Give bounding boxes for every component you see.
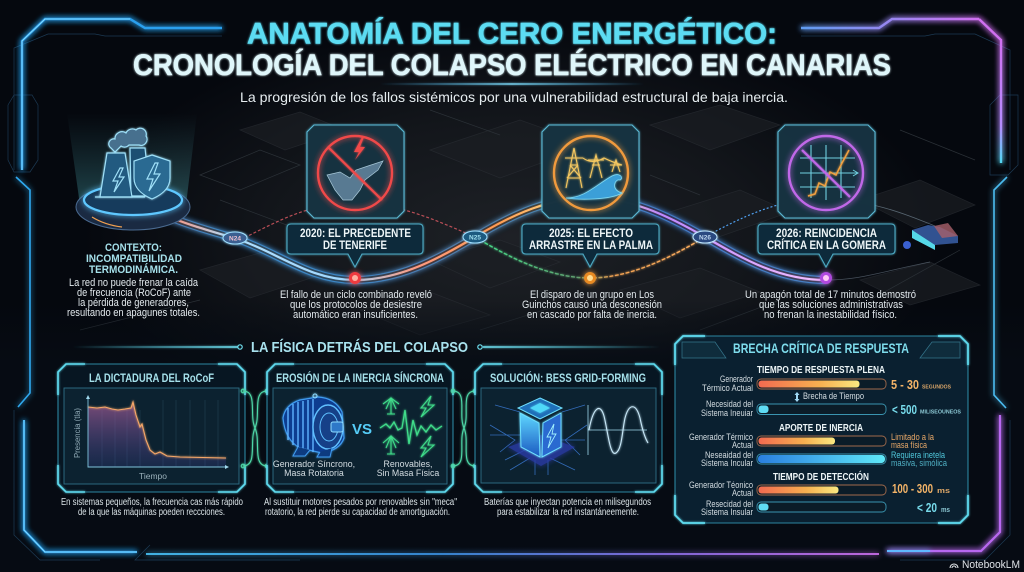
group: detection time: Actual	[732, 488, 753, 498]
description: que las soluciones administrativas	[759, 299, 904, 311]
broken pipe fragment	[903, 223, 958, 250]
group: detection time: TIEMPO DE DETECCIÓN	[773, 470, 869, 483]
callout heading: 2026: REINCIDENCIA	[776, 226, 877, 240]
watermark: NotebookLM: NotebookLM	[962, 559, 1020, 571]
decorative header details	[682, 342, 960, 358]
description: automático eran insuficientes.	[293, 309, 418, 321]
timeline badge N25: N25	[469, 234, 481, 242]
timeline node	[584, 272, 596, 284]
group: full response time: Sistema Ineuiar	[701, 408, 753, 418]
card: unstable grid	[778, 125, 875, 218]
description	[280, 289, 432, 321]
callout heading	[287, 224, 423, 267]
timeline badge N26	[693, 231, 717, 243]
motor label	[273, 459, 355, 478]
renewables label: Renovables,	[384, 459, 432, 469]
panel title: BRECHA CRÍTICA DE RESPUESTA	[733, 340, 909, 356]
chart: frequency drop	[64, 388, 239, 484]
chart: sine wave	[588, 405, 648, 455]
panel title: EROSIÓN DE LA INERCIA SÍNCRONA	[276, 371, 444, 385]
caption: En sistemas pequeños, la frecuencia cas más rápido	[61, 497, 243, 508]
subtitle: La progresión de los fallos sistémicos por una vulnerabilidad estructural de baja inercia.	[240, 89, 788, 105]
milestone 2026	[745, 125, 916, 321]
group: detection time: 100 - 300	[892, 482, 933, 496]
group: full response time: SEGUNDOS	[922, 384, 952, 390]
group: detection time: ms	[937, 488, 950, 495]
card: pylons and wave	[542, 125, 639, 218]
group: inertia contribution: Limitado a la	[891, 432, 934, 442]
group: full response time: Brecha de Tiempo	[803, 391, 864, 401]
context: power plant icon	[67, 113, 197, 230]
group: inertia contribution: masa física	[891, 440, 927, 450]
description: El fallo de un ciclo combinado reveló	[280, 289, 432, 301]
description: en cascado por falta de inercia.	[527, 309, 657, 321]
title: CRONOLOGÍA DEL COLAPSO ELÉCTRICO EN CANARIAS	[133, 48, 891, 82]
group: inertia contribution: Requiera inetela	[891, 450, 945, 460]
group: full response time: TIEMPO DE RESPUESTA PLENA	[757, 365, 885, 376]
context text: la pérdida de generadores,	[78, 297, 189, 309]
callout heading: 2020: EL PRECEDENTE	[300, 226, 411, 240]
group: inertia contribution: Actual	[732, 440, 753, 450]
card: no power Tenerife	[307, 125, 404, 218]
title	[133, 16, 891, 82]
section heading: physics: LA FÍSICA DETRÁS DEL COLAPSO	[251, 339, 468, 356]
context text: resultando en apagunes totales.	[67, 307, 200, 319]
callout heading: CRÍTICA EN LA GOMERA	[767, 237, 886, 252]
description: no frenan la inestabilidad físico.	[764, 309, 897, 321]
motor label: Generador Síncrono,	[273, 459, 355, 469]
caption	[484, 497, 651, 518]
renewables label	[377, 459, 439, 478]
icon: motor	[283, 394, 344, 457]
caption: rotatorio, la red pierde su capacidad de amortiguación.	[265, 507, 450, 518]
panel: synchronous inertia	[264, 364, 457, 518]
context text: de frecuencia (RoCoF) ante	[77, 287, 191, 299]
description: Guinchos causó una desconesión	[522, 299, 662, 311]
milestone 2020	[280, 125, 432, 321]
chart: frequency drop: Tiempo	[139, 471, 167, 481]
label: VS: VS	[352, 421, 372, 438]
caption	[264, 497, 457, 518]
callout heading: DE TENERIFE	[323, 238, 387, 252]
description	[745, 289, 916, 321]
description: El disparo de un grupo en Los	[530, 289, 655, 301]
connector between panels 2 and 3	[451, 389, 477, 468]
group: detection time: < 20	[917, 501, 937, 515]
group: inertia contribution: masiva, simólica	[891, 458, 947, 468]
group: inertia contribution	[689, 423, 947, 468]
group: full response time: Necesidad del	[706, 399, 753, 409]
description	[522, 289, 662, 321]
group: full response time: Térmico Actual	[702, 383, 753, 393]
context text: INCOMPATIBILIDAD	[86, 253, 182, 265]
group: detection time: Sistema Insular	[701, 507, 753, 517]
group: inertia contribution: Generador Térmico	[689, 432, 753, 442]
caption: de la que las máquinas poeden reccciones.	[78, 507, 225, 518]
callout heading	[758, 224, 895, 267]
group: full response time: 5 - 30	[891, 378, 919, 392]
description: que los protocolos de desiestre	[290, 299, 422, 311]
group: inertia contribution: APORTE DE INERCIA	[779, 423, 863, 434]
timeline badge N24: N24	[229, 236, 241, 242]
group: full response time: Generador	[720, 374, 753, 384]
timeline node	[820, 272, 832, 284]
caption: Baterías que inyectan potencia en milisegundos	[484, 497, 651, 508]
context text	[67, 242, 200, 319]
renewables label: Sin Masa Física	[377, 468, 439, 478]
title underline	[380, 83, 644, 85]
context text: La red no puede frenar la caída	[69, 277, 198, 289]
title: ANATOMÍA DEL CERO ENERGÉTICO:	[247, 16, 777, 50]
timeline badge N26: N26	[699, 234, 711, 242]
group: detection time: Generador Téonico	[689, 480, 753, 490]
group: detection time	[689, 470, 950, 517]
caption: Al sustituir motores pesados por renovables sin "meca"	[264, 497, 457, 508]
section heading: physics	[73, 339, 660, 356]
description: Un apagón total de 17 minutos demostró	[745, 289, 916, 301]
icon: battery cube	[490, 398, 587, 475]
group: inertia contribution: Neseaidad del	[705, 450, 753, 460]
timeline badge N25	[463, 231, 487, 243]
group: inertia contribution: Sistema Incular	[701, 458, 753, 468]
icon: renewables	[380, 396, 442, 457]
caption: para estabilizar la red instantáneemente.	[497, 507, 639, 518]
callout heading: 2025: EL EFECTO	[549, 226, 633, 240]
panel title: LA DICTADURA DEL RoCoF	[89, 371, 214, 385]
callout heading: ARRASTRE EN LA PALMA	[529, 238, 653, 252]
group: detection time: ms	[941, 507, 950, 514]
panel title: SOLUCIÓN: BESS GRID-FORMING	[490, 371, 646, 385]
context text: CONTEXTO:	[105, 242, 162, 254]
callout heading	[522, 224, 659, 267]
group: full response time: < 500	[892, 403, 917, 417]
chart: frequency drop: Presencia (tla)	[72, 408, 82, 458]
timeline path	[165, 198, 935, 280]
context text: TERMODINÁMICA.	[89, 263, 178, 276]
timeline badge N24	[223, 232, 247, 244]
caption	[61, 497, 243, 518]
connector between panels 1 and 2	[241, 389, 269, 468]
group: detection time: Resecidad del	[706, 499, 753, 509]
panel: BESS solution	[475, 364, 662, 518]
group: full response time: MILISEOUNEOS	[920, 410, 962, 416]
milestone 2025	[522, 125, 662, 321]
group: full response time	[701, 365, 962, 418]
motor label: Masa Rotatoria	[284, 468, 344, 478]
timeline node	[349, 272, 361, 284]
panel: critical response gap	[675, 336, 968, 523]
panel: RoCoF	[58, 364, 245, 518]
